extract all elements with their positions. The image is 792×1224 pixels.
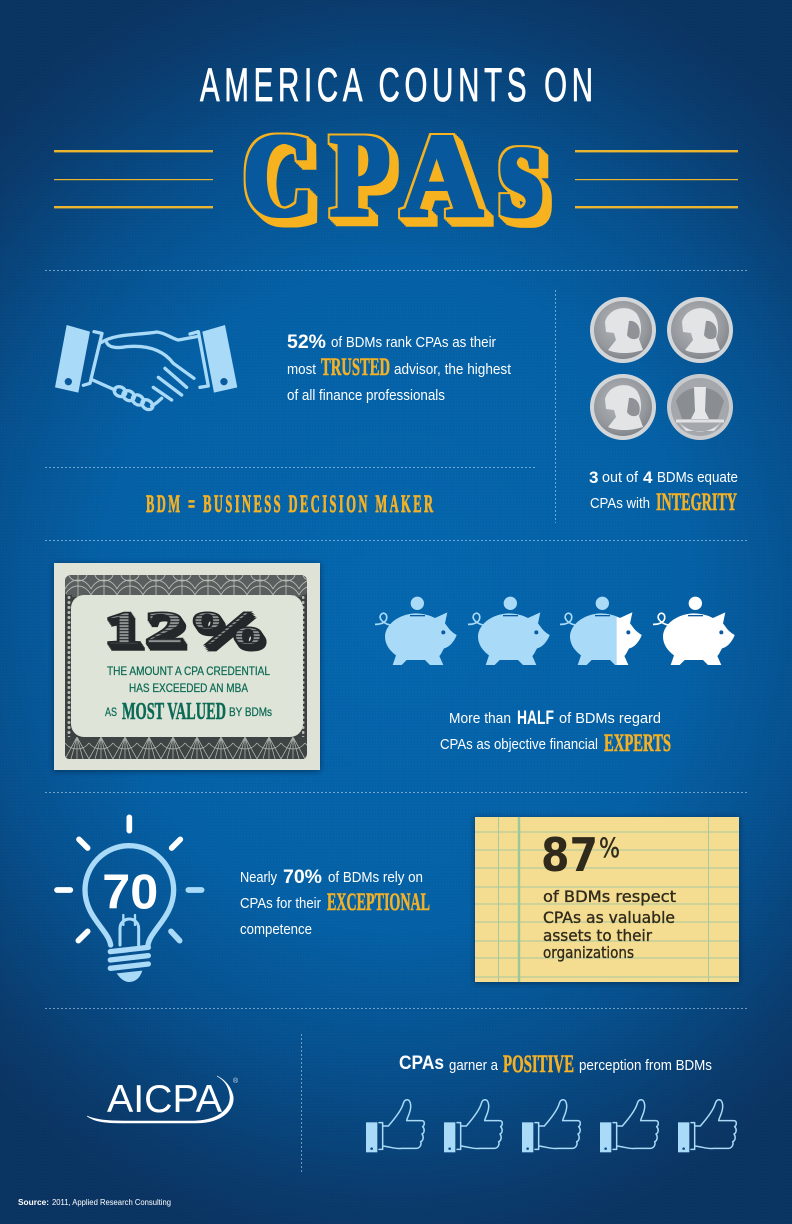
text: 3 out of 4 integrity: BDMs equate <box>657 470 738 486</box>
text: nearly 70% exceptional: Nearly <box>240 870 278 886</box>
text: positive perception <box>399 1051 712 1078</box>
text: 52% trusted advisor <box>287 332 511 404</box>
text: 52% trusted advisor: advisor, the highest <box>394 362 511 378</box>
text: nearly 70% exceptional <box>240 867 430 938</box>
text: positive perception: perception from BDMs <box>579 1058 712 1074</box>
text: positive perception: POSITIVE <box>503 1051 574 1078</box>
icon: handshake <box>55 325 237 412</box>
logo: AICPA: AICPA <box>107 1078 222 1121</box>
note text: BY BDMs <box>229 705 272 719</box>
text: more than half: of BDMs regard <box>559 711 661 727</box>
handwritten note: assets to their <box>543 926 652 945</box>
note text <box>105 664 272 725</box>
text: 52% trusted advisor: 52% <box>287 332 326 353</box>
text: more than half <box>440 708 671 757</box>
number 87%: 87 <box>541 828 598 882</box>
note text: AS <box>105 705 117 719</box>
text: more than half: CPAs as objective financial <box>440 737 598 753</box>
handwritten note <box>543 887 676 962</box>
icon: quarter heads <box>590 297 733 440</box>
logo: AICPA: ® <box>233 1077 239 1085</box>
big number 12%: 12% <box>102 602 269 655</box>
handwritten note: organizations <box>543 943 634 962</box>
text: 3 out of 4 integrity <box>589 468 738 516</box>
text: 52% trusted advisor: of all finance professionals <box>287 388 445 404</box>
text: more than half: HALF <box>517 708 554 729</box>
icon: thumbs up row <box>366 1100 736 1152</box>
logo: AICPA <box>87 1076 239 1123</box>
heading: CPAs: s <box>500 88 542 246</box>
source note: 2011, Applied Research Consulting <box>52 1198 171 1207</box>
text: 52% trusted advisor: TRUSTED <box>321 354 390 381</box>
text: nearly 70% exceptional: 70% <box>283 867 322 888</box>
note text: HAS EXCEEDED AN MBA <box>129 681 248 695</box>
text: nearly 70% exceptional: EXCEPTIONAL <box>327 889 430 916</box>
heading: CPAs: C <box>244 108 312 242</box>
definition: BDM = business decision maker: BDM = BUSINESS DECISION MAKER <box>146 490 433 518</box>
text: nearly 70% exceptional: CPAs for their <box>240 896 321 912</box>
heading: CPAs: A <box>402 108 482 242</box>
text: 3 out of 4 integrity: CPAs with <box>590 496 650 512</box>
text: 3 out of 4 integrity: out of <box>602 470 639 486</box>
text: 52% trusted advisor: of BDMs rank CPAs as their <box>331 335 496 351</box>
panel: legal pad note 87% <box>475 817 739 982</box>
text: more than half: EXPERTS <box>604 730 671 757</box>
panel: banknote 12% <box>54 563 320 770</box>
text: more than half: More than <box>449 711 511 727</box>
text: positive perception: CPAs <box>399 1053 444 1074</box>
text: nearly 70% exceptional: competence <box>240 922 312 938</box>
text: 3 out of 4 integrity: 4 <box>643 468 653 487</box>
text: 3 out of 4 integrity: 3 <box>589 468 598 487</box>
source note: Source: <box>18 1198 49 1207</box>
number 70: 70 <box>102 865 158 919</box>
icon: quarter tails <box>667 374 733 440</box>
note text: THE AMOUNT A CPA CREDENTIAL <box>107 664 270 678</box>
icon: light bulb with 70 <box>57 817 202 982</box>
handwritten note: CPAs as valuable <box>543 908 675 927</box>
heading: CPAs: P <box>331 108 389 242</box>
heading: CPAs <box>244 88 542 246</box>
dashed dividers <box>45 270 748 1172</box>
rules right of CPAs <box>575 150 738 208</box>
icon: piggy banks <box>375 597 735 665</box>
handwritten note: of BDMs respect <box>543 887 676 906</box>
rules left of CPAs <box>54 150 213 208</box>
text: nearly 70% exceptional: of BDMs rely on <box>328 870 423 886</box>
note text: MOST VALUED <box>122 699 226 725</box>
title: America Counts On: AMERICA COUNTS ON <box>200 59 593 112</box>
text: positive perception: garner a <box>449 1058 499 1074</box>
text: 52% trusted advisor: most <box>287 362 316 378</box>
number 87%: % <box>599 833 620 864</box>
